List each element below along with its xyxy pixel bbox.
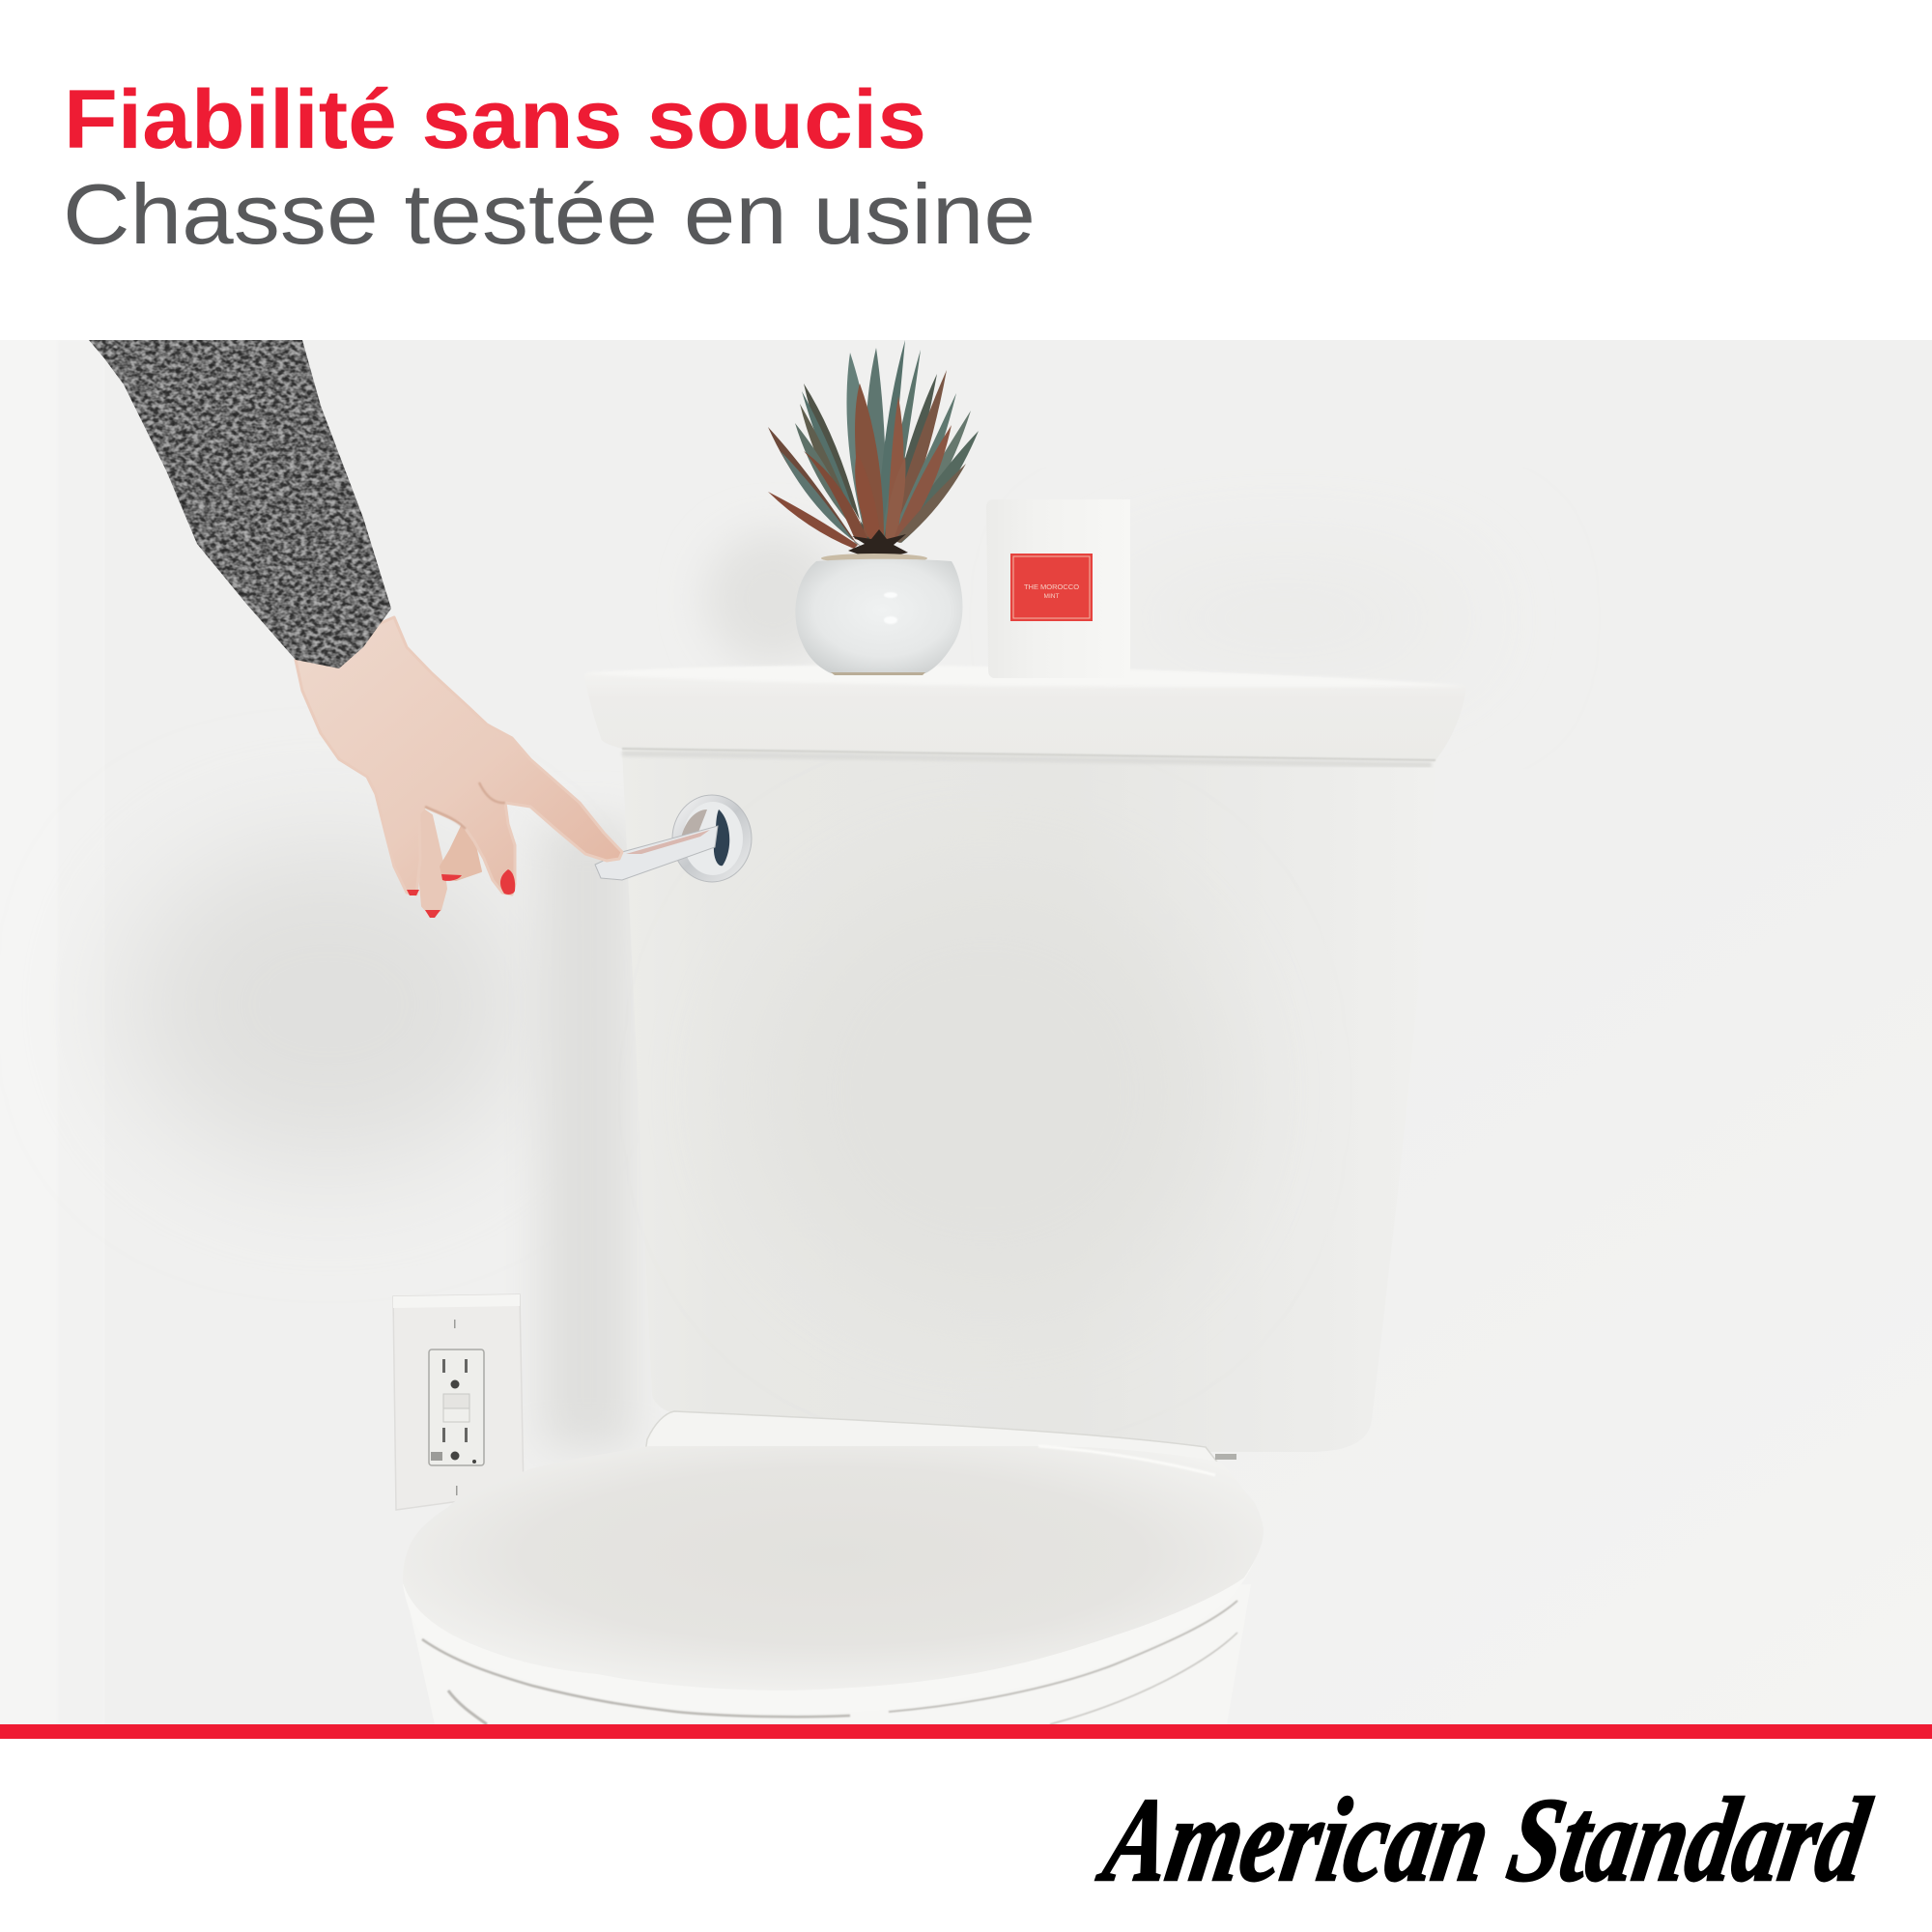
tank lid: [584, 666, 1466, 765]
toilet tank body: [671, 759, 1251, 1452]
seat gap shadows: [422, 1601, 1237, 1724]
candle: [988, 541, 1130, 678]
ceramic pot: [795, 559, 962, 673]
plant base rosette: [848, 529, 908, 558]
socket face: [429, 1350, 484, 1465]
folded finger: [440, 826, 481, 880]
chrome lever: [595, 826, 718, 880]
seat lid top highlight: [1038, 1446, 1215, 1475]
panel: bathroom photo scene: [0, 340, 1932, 1724]
hinge cover: [645, 1411, 1219, 1464]
socket details: [431, 1359, 476, 1463]
red nail polish: [407, 869, 515, 918]
lever reflection: [626, 830, 710, 854]
pot highlights: [884, 592, 897, 624]
candle label: MINT: [1044, 593, 1059, 600]
bowl: [410, 1584, 1251, 1724]
chrome rosette: [672, 795, 752, 882]
potted plant: [768, 340, 979, 675]
middle finger: [419, 807, 446, 917]
tank shading: [753, 869, 1217, 1314]
wall background: [0, 340, 1932, 1724]
hinge metal: [1215, 1454, 1236, 1460]
seat lid rim: [403, 1529, 1264, 1713]
toilet bowl and seat: [403, 1411, 1264, 1724]
wall shadows: [135, 354, 978, 1451]
flush handle: [595, 795, 752, 882]
outlet plate: [393, 1294, 524, 1510]
plant leaves: [768, 340, 979, 549]
seat lid top face: [403, 1446, 1264, 1690]
pot base: [831, 672, 925, 675]
candle label: [1010, 554, 1093, 621]
red divider bar: [0, 1724, 1932, 1739]
title block: [63, 73, 1036, 262]
hand: [296, 617, 622, 918]
hand crease shadow: [425, 782, 505, 829]
wall outlet: [393, 1294, 524, 1510]
door frame on the left: [0, 340, 104, 1724]
sweater sleeve: [89, 340, 391, 668]
subheading: Chasse testée en usine: Chasse testée en usine: [63, 166, 1036, 262]
gravel: [821, 554, 927, 563]
heading: Fiabilité sans soucis: Fiabilité sans soucis: [64, 73, 926, 166]
palm with index, ring and little fingers: [296, 617, 622, 895]
plate screws: [454, 1320, 458, 1495]
candle label: THE MOROCCO: [1024, 582, 1079, 591]
